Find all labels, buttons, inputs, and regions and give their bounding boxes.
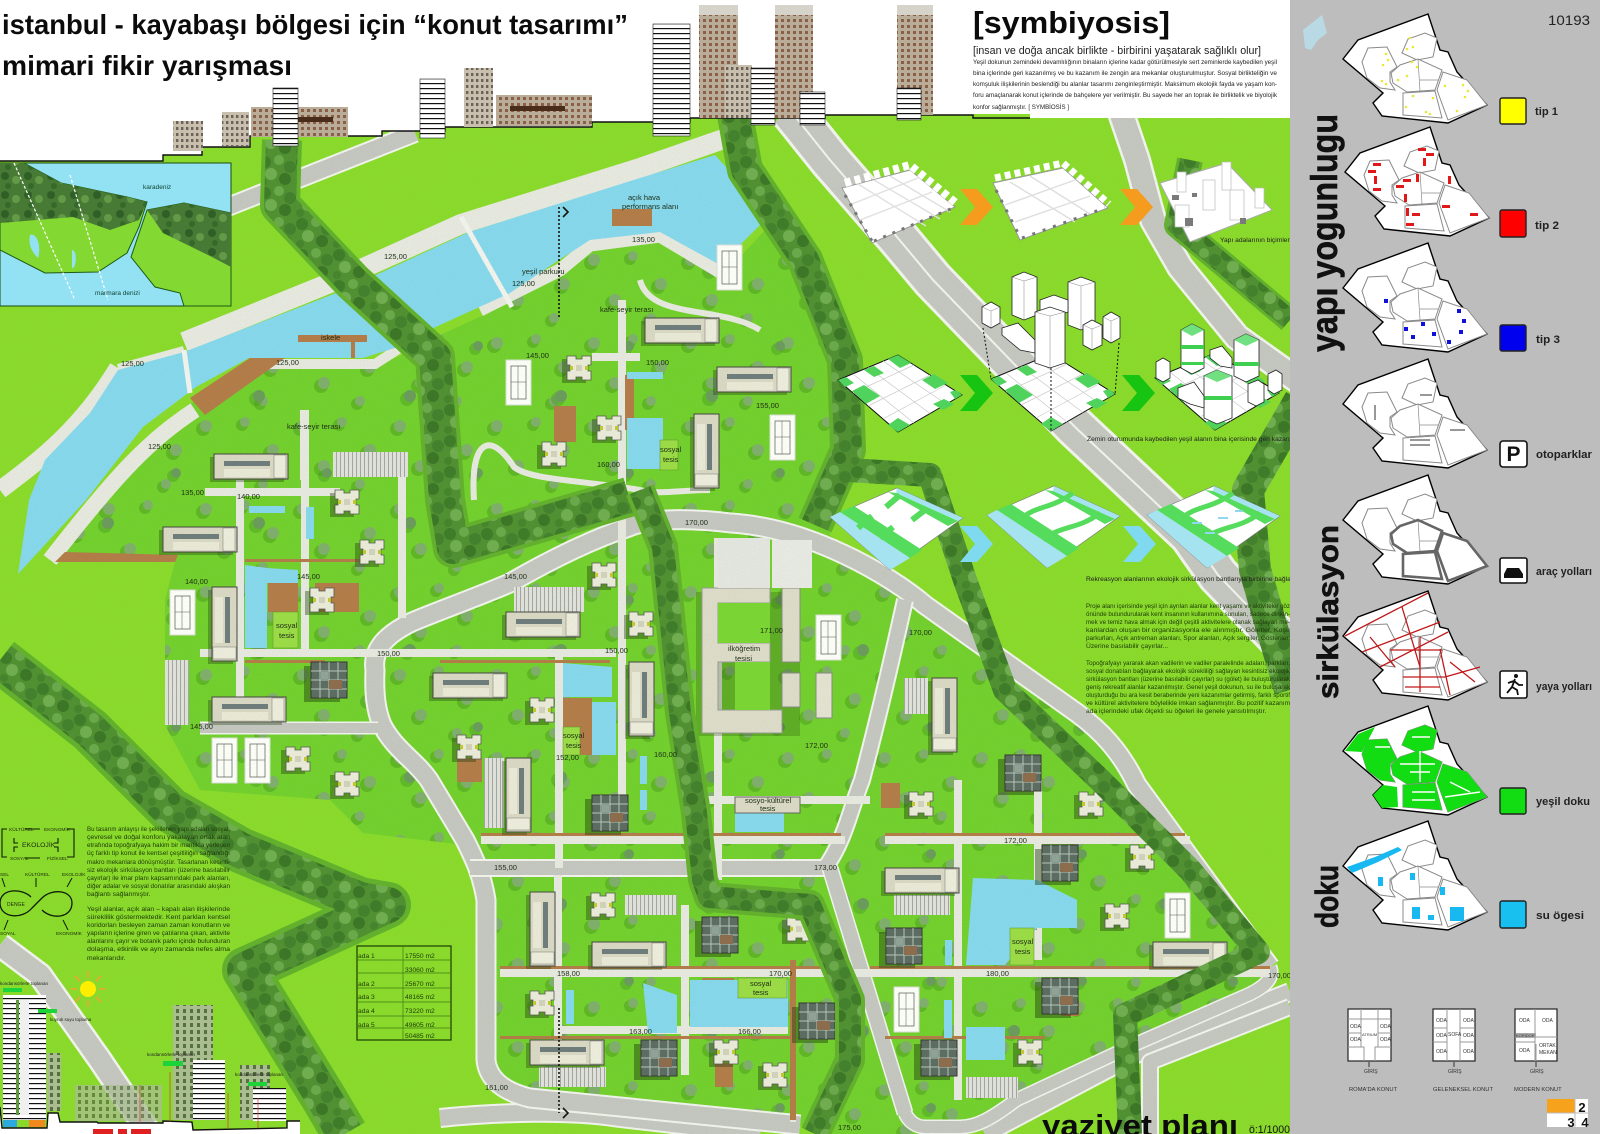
paragraph: green areas: kanlardan oluşan bir organizasyonla ele alınmıştır. Göletler, Koşu — [1086, 627, 1290, 634]
area table: ada 3 — [358, 994, 375, 1001]
right text block — [1086, 576, 1311, 715]
plan annotations: elevations and names: 158,00 — [557, 969, 580, 978]
diagram: ecological square — [2, 826, 74, 862]
plan annotations: elevations and names: 160,00 — [597, 460, 620, 469]
paragraph: topography: oluşturduğu bu ara kesit beraberinde yeni kazanımlar getirmiş, farklı sportif — [1086, 692, 1290, 699]
arrows: cyan chevrons — [960, 526, 1156, 562]
plan annotations: elevations and names: 160,00 — [654, 750, 677, 759]
key plan: otoparklar — [1343, 359, 1487, 468]
house plan: modern konut: ODA — [1542, 1018, 1554, 1024]
plan annotations: elevations and names: kafe-seyir terası — [287, 422, 340, 431]
road: curved top-right road — [1120, 110, 1300, 382]
concept text block: bina içlerinde geri kazanılmış ve bu kazanım ile zengin ara mekanlar oluşturulmuştur. Sosyal birlikteliğin ve — [973, 70, 1277, 77]
plan annotations: elevations and names: kafe-seyir terası — [600, 305, 653, 314]
wood decks along the river — [55, 209, 652, 562]
house plan: geleneksel konut: ODA — [1463, 1049, 1474, 1055]
house plan: geleneksel konut: GİRİŞ — [1448, 1068, 1462, 1075]
area table: 33060 m2 — [405, 967, 435, 974]
paragraph: topography: geniş rekreatif alanlar kazanılmıştır. Genel yeşil dokunun, su ile buluşarak — [1086, 684, 1291, 691]
concept text block: Yeşil dokunun zemindeki devamlılığının binaların içlerine kadar götürülmesiyle sert zeminlerde kaybedilen yeşil — [973, 59, 1277, 66]
diagram: balance infinity: SEL — [0, 872, 9, 878]
icon: sun — [70, 971, 106, 1007]
left text block: üç farklı tip konut ile kentsel çeşitliliğin sağlandığı — [87, 850, 230, 857]
area table: 73220 m2 — [405, 1008, 435, 1015]
left text block: diğer adalar ve sosyal donatılar arasındaki akışkan — [87, 883, 230, 890]
plan annotations: elevations and names: sosyal — [750, 979, 772, 988]
title: istanbul - kayabaşı bölgesi için “konut tasarımı” — [2, 9, 628, 40]
plan annotations: elevations and names: 155,00 — [494, 863, 517, 872]
house plan: roma'da konut: ATRIUM — [1362, 1032, 1377, 1037]
key plan: su ögesi — [1343, 821, 1487, 930]
road: lower-left diagonal road — [0, 945, 150, 1134]
arrows: green chevrons — [960, 375, 1155, 411]
plan annotations: elevations and names: 170,00 — [1268, 971, 1291, 980]
section cut markers — [559, 207, 568, 1118]
vertical heading: sirkülasyon: sirkülasyon — [1312, 525, 1345, 699]
wood strips beside walkways — [245, 375, 1270, 1120]
plan annotations: elevations and names: iskele — [321, 333, 340, 342]
plan annotations: elevations and names: 166,00 — [738, 1027, 761, 1036]
plan annotations: elevations and names: 150,00 — [605, 646, 628, 655]
plan annotations: elevations and names: 175,00 — [838, 1123, 861, 1132]
grain overlay — [0, 118, 1290, 1134]
house plan: modern konut: ORTAK — [1539, 1043, 1556, 1049]
area table: 25670 m2 — [405, 981, 435, 988]
caption: building islands: Yapı adalarının biçimlenişi — [1220, 237, 1298, 244]
house plan: modern konut — [1514, 1009, 1562, 1093]
left text block: çayırlar) ile imar planı kapsamındaki park alanları, — [87, 875, 230, 882]
paragraph: topography: Topoğrafyayı yararak akan vadilerin ve vadiler paralelinde adaları, parkları, — [1086, 660, 1290, 667]
house plan: roma'da konut: ODA — [1380, 1024, 1392, 1030]
buildings: cross plan houses — [281, 356, 1154, 1090]
building section drawing: kondansörlerle toplanan — [0, 981, 49, 986]
plan annotations: elevations and names: 145,00 — [297, 572, 320, 581]
plan annotations: elevations and names: sosyal — [563, 731, 585, 740]
plan annotations: elevations and names: 152,00 — [556, 753, 579, 762]
plan annotations: elevations and names: tesis — [663, 455, 679, 464]
sheet index 1-2-3-4 — [1547, 1099, 1589, 1130]
plan annotations: elevations and names: 150,00 — [377, 649, 400, 658]
house plan: roma'da konut: ODA — [1350, 1037, 1362, 1043]
bridges over the lake — [184, 217, 512, 393]
plan annotations: elevations and names: 172,00 — [805, 741, 828, 750]
main roads of the site — [200, 520, 1271, 1127]
icon: pedestrian — [1500, 671, 1527, 698]
house plan: roma'da konut: GİRİŞ — [1364, 1068, 1378, 1075]
left text block: Yeşil alanlar, açık alan – kapalı alan ilişkilerinde — [87, 906, 230, 913]
plan annotations: elevations and names: 170,00 — [769, 969, 792, 978]
building section drawing: kuyruk suyu toplama — [50, 1017, 92, 1022]
area table — [357, 946, 451, 1040]
plan annotations: elevations and names: 163,00 — [629, 1027, 652, 1036]
house plan: modern konut: MODERN KONUT — [1514, 1087, 1562, 1093]
diagram: ecological square: SOSYAL — [10, 856, 29, 862]
plan annotations: elevations and names: 161,00 — [485, 1083, 508, 1092]
left text block — [87, 826, 231, 962]
caption: ground recovery: Zemin oturumunda kaybedilen yeşil alanın bina içerisinde geri kazanılması — [1087, 436, 1308, 443]
primary school building — [696, 538, 832, 736]
promenade: river walkways — [0, 135, 735, 560]
plan annotations: elevations and names: sosyal — [276, 621, 298, 630]
plan annotations: elevations and names: 171,00 — [760, 626, 783, 635]
plan annotations: elevations and names: açık hava — [628, 193, 661, 202]
house plan: geleneksel konut: ODA — [1463, 1033, 1474, 1039]
paragraph: topography: sirkülasyon bantları (üzerine basılabilir çayırlar) su (gölet) ile buluşturularak — [1086, 676, 1291, 683]
plan annotations: elevations and names: 145,00 — [504, 572, 527, 581]
plan annotations: elevations and names: tesis — [1015, 947, 1031, 956]
left text block: süreklilik göstermektedir. Kent parkları kentsel — [87, 914, 231, 921]
plan annotations: elevations and names: 125,00 — [384, 252, 407, 261]
house plan: roma'da konut — [1348, 1009, 1398, 1093]
title: mimari fikir yarışması — [2, 50, 292, 81]
isometric step row 3: recreation sheets — [830, 486, 1280, 570]
house plan: geleneksel konut — [1433, 1009, 1493, 1093]
label: yeşil doku: yeşil doku — [1536, 796, 1590, 808]
house plan: geleneksel konut: ODA — [1436, 1049, 1448, 1055]
left text block: Bu tasarım anlayışı ile şekillenen yapı adaları sosyal, — [87, 826, 230, 833]
arrows: orange chevrons — [960, 189, 1153, 225]
plan annotations: elevations and names: tesis — [753, 988, 769, 997]
label: araç yolları: araç yolları — [1536, 566, 1592, 578]
area table: 50485 m2 — [405, 1033, 435, 1040]
plan annotations: elevations and names: tesisi — [735, 654, 752, 663]
house plan: roma'da konut: ODA — [1380, 1037, 1392, 1043]
plan annotations: elevations and names: 135,00 — [181, 488, 204, 497]
house plan: geleneksel konut: GELENEKSEL KONUT — [1433, 1087, 1493, 1093]
plan annotations: elevations and names: tesis — [760, 804, 776, 813]
left text block: çevresel ve doğal konforu yakalayan ortak alan — [87, 834, 230, 841]
key plan: tip 3 — [1343, 243, 1487, 352]
diagram: balance infinity: EKONOMİK — [56, 930, 83, 937]
plan annotations: elevations and names: sosyo-kültürel — [745, 796, 792, 805]
paragraph: topography: ada içlerindeki ufak ölçekli su öğeleri ile genele yansıtılmıştır. — [1086, 708, 1266, 715]
area table: 48165 m2 — [405, 994, 435, 1001]
left text block: alanlarını çayır ve botanik parkı içinde bulunduran — [87, 938, 230, 945]
skyline elevation — [173, 5, 933, 151]
left text block: yapıların içlerine giren ve çatılarına çıkan, aktivite — [87, 930, 230, 937]
diagram: balance infinity: SOYAL — [0, 931, 16, 937]
icon: parking: P — [1506, 443, 1521, 466]
icon: water logo — [1303, 15, 1327, 50]
plan annotations: elevations and names: 135,00 — [632, 235, 655, 244]
label: su ögesi: su ögesi — [1536, 910, 1584, 922]
house plan: modern konut: KORİDOR — [1516, 1033, 1535, 1038]
swatch: yeşil doku — [1500, 788, 1526, 814]
paragraph: topography: sosyal donatıları bağlayarak ekolojik sürekliliği sağlayan kesintisiz ekolojik — [1086, 668, 1291, 675]
plan annotations: elevations and names: sosyal — [660, 445, 682, 454]
road: lower highways — [440, 992, 1290, 1134]
plan annotations: elevations and names: 170,00 — [909, 628, 932, 637]
area table: ada 1 — [358, 953, 375, 960]
key plan: tip 2 — [1345, 127, 1489, 236]
sidebar panel — [1290, 0, 1600, 1134]
label: otoparklar: otoparklar — [1536, 449, 1593, 461]
house plan: geleneksel konut: SOFA — [1448, 1032, 1462, 1038]
diagram: balance infinity: DENGE — [7, 902, 25, 908]
vertical heading: yapı yogunlugu: yapı yogunlugu — [1304, 114, 1345, 352]
swatch: tip 2 — [1500, 210, 1526, 237]
diagram: ecological square: EKONOMİK — [44, 826, 71, 833]
plan annotations: elevations and names: yeşil parkuru — [522, 267, 565, 276]
key plan: tip 1 — [1343, 14, 1487, 123]
paragraph: green areas: önünde bulundurularak kent insanının kullanımına sunulan, sadece dinlen- — [1086, 611, 1290, 618]
diagram: balance infinity: KÜLTÜREL — [25, 871, 50, 878]
swatch: tip 1 — [1500, 98, 1526, 124]
label: tip 3: tip 3 — [1536, 334, 1560, 346]
building section drawing: kondansörlerle toplanan — [147, 1052, 196, 1057]
location map inset: marmara denizi — [95, 290, 140, 297]
left text block: etrafında topoğrafyaya hakim bir mantıkla yerleşen — [87, 842, 230, 849]
key plan: yaya yolları — [1343, 591, 1487, 700]
parking lots — [165, 452, 1018, 1098]
plan annotations: elevations and names: 150,00 — [646, 358, 669, 367]
sky: white upper band — [0, 0, 1290, 161]
paragraph: topography: ve kültürel aktivitelere böylelikle imkan sağlanmıştır. Bu pozitif kazanım — [1086, 700, 1290, 707]
project number: 10193 — [1548, 12, 1590, 28]
left text block: mekanlarıdır. — [87, 955, 126, 962]
plan annotations: elevations and names: 170,00 — [685, 518, 708, 527]
diagram: ecological square: KÜLTÜREL — [9, 826, 34, 833]
area table: ada 2 — [358, 981, 375, 988]
paragraph: green areas: Proje alanı içerisinde yeşil için ayrılan alanlar kent yaşamı ve aktiviteler göz — [1086, 603, 1291, 610]
left text block: siz ekolojik sirkülasyon bantları (üzerine basılabilir — [87, 867, 231, 874]
plan annotations: elevations and names: 125,00 — [148, 442, 171, 451]
corridor: lower-left band D — [0, 660, 388, 1134]
left text block: dolaşma, etkinlik ve aynı zamanda nefes alma — [87, 946, 230, 953]
diagram: ecological square: FİZİKSEL — [47, 855, 68, 862]
corridor: upper diagonal band C — [735, 115, 1258, 1134]
icon: parking — [1500, 441, 1527, 467]
house plan: modern konut: ODA — [1519, 1048, 1530, 1054]
plan annotations: elevations and names: tesis — [279, 631, 295, 640]
area table: ada 4 — [358, 1008, 375, 1015]
paragraph: green areas: mek ve temiz hava almak için değil çeşitli aktivitelere olanak sağlayan me- — [1086, 619, 1290, 626]
left text block: makro mekanlara dönüşmüştür. Tasarlanan kesinti- — [87, 859, 230, 866]
swatch: su ögesi — [1500, 901, 1526, 928]
plan annotations: elevations and names: 125,00 — [512, 279, 535, 288]
plan annotations: elevations and names: 140,00 — [237, 492, 260, 501]
pedestrian walkways — [200, 280, 1270, 1122]
plan annotations: elevations and names: ilköğretim — [728, 644, 760, 653]
road: upper-left diagonal road — [225, 133, 415, 208]
left text block: koridorları besleyen zaman zaman konutların ve — [87, 922, 230, 929]
plan annotations: elevations and names: 145,00 — [190, 722, 213, 731]
left text block: bağlantı sağlanmıştır. — [87, 891, 151, 898]
isometric step row 1: building blocks — [842, 162, 1272, 243]
paragraph: topography — [1086, 660, 1291, 715]
label: tip 1: tip 1 — [1535, 106, 1558, 118]
house plan: modern konut: ODA — [1519, 1018, 1530, 1024]
key plan: yeşil doku — [1343, 706, 1487, 815]
buildings: slab blocks — [159, 318, 1227, 1068]
area table: 17550 m2 — [405, 953, 435, 960]
concept text block — [973, 59, 1278, 111]
heading: symbiyosis: [symbiyosis] — [973, 5, 1170, 40]
caption: recreation circulation: Rekreasyon alanlarının ekolojik sirkülasyon bantlarıyla birbirine bağlanması. — [1086, 576, 1311, 583]
area table: ada 5 — [358, 1022, 375, 1029]
plan base: site plot — [50, 225, 1270, 1134]
icon: car — [1500, 558, 1527, 583]
location map inset — [0, 163, 231, 306]
building section drawing — [0, 981, 300, 1134]
plan annotations: elevations and names: 125,00 — [276, 358, 299, 367]
diagram: balance infinity: EKOLOJİK — [62, 871, 86, 878]
diagram: balance infinity — [0, 871, 86, 937]
social building: sosyo-kultürel tesis — [735, 797, 800, 813]
social facility pads — [273, 440, 1034, 998]
courts: basketball and tennis — [170, 245, 1190, 1032]
plan annotations: elevations and names: 155,00 — [756, 401, 779, 410]
corridor: central band B — [640, 490, 850, 1134]
area table: 49605 m2 — [405, 1022, 435, 1029]
water: river and lake — [18, 155, 770, 574]
plan annotations: elevations and names: performans alanı — [622, 202, 678, 211]
plan annotations: elevations and names: 180,00 — [986, 969, 1009, 978]
house plan: roma'da konut: ODA — [1350, 1024, 1362, 1030]
isometric step row 2: ground plates and towers — [838, 272, 1282, 432]
concept text block: komşuluk ilişkilerinin beslendiği bu alanlar tasarımı zenginleştirmiştir. Maksimum ekolojik fayda ve yaşam kon- — [973, 81, 1277, 88]
concept text block: foru amaçlanarak konut içlerinde de bahçelere yer verilmiştir. Bu sayede her an toprak ile birliktelik ve biyolojik — [973, 92, 1278, 99]
plan annotations: elevations and names: 145,00 — [526, 351, 549, 360]
subheading: [insan ve doğa ancak birlikte - birbirini yaşatarak sağlıklı olur] — [973, 45, 1261, 57]
diagram: ecological square: EKOLOJİK — [22, 840, 56, 849]
plan annotations: elevations and names: 140,00 — [185, 577, 208, 586]
ponds inside the islands — [245, 372, 1077, 1060]
swatch: tip 3 — [1500, 325, 1526, 351]
paragraph: green areas: parkurları, Açık antreman alanları, Spor alanları, Açık sergiler, Gösteriler, — [1086, 635, 1290, 642]
sheet index 1-2-3-4: 2 — [1578, 1100, 1586, 1115]
house plan: roma'da konut: ROMA'DA KONUT — [1349, 1087, 1398, 1093]
vertical heading: doku: doku — [1309, 865, 1345, 928]
plan annotations: elevations and names — [121, 193, 1291, 1132]
buildings: glass tower blocks — [304, 662, 1078, 1080]
corridor: main ecological band A — [280, 140, 629, 548]
house plan: modern konut: GİRİŞ — [1530, 1068, 1544, 1075]
concept text block: konfor sağlanmıştır. [ SYMBİOSİS ] — [973, 102, 1069, 111]
label: yaya yolları: yaya yolları — [1536, 681, 1592, 693]
house plan: geleneksel konut: ODA — [1436, 1033, 1448, 1039]
sheet index 1-2-3-4: 4 — [1581, 1115, 1589, 1130]
plan annotations: elevations and names: 173,00 — [814, 863, 837, 872]
key plan: araç yolları — [1343, 475, 1487, 584]
plan annotations: elevations and names: tesis — [566, 741, 582, 750]
paragraph: green areas — [1086, 603, 1291, 650]
terrain ground line — [0, 115, 1030, 161]
plan annotations: elevations and names: 172,00 — [1004, 836, 1027, 845]
building section drawing: kondansörlerle toplanan — [235, 1072, 284, 1077]
house plan: geleneksel konut: ODA — [1436, 1018, 1448, 1024]
sheet index 1-2-3-4: 3 — [1567, 1115, 1575, 1130]
plan annotations: elevations and names: sosyal — [1012, 937, 1034, 946]
house plan: modern konut: MEKAN — [1539, 1050, 1557, 1056]
title — [2, 9, 628, 81]
location map inset: karadeniz — [143, 184, 171, 191]
paragraph: green areas: Üzerine basılabilir çayırlar... — [1086, 642, 1168, 650]
house plan: geleneksel konut: ODA — [1463, 1018, 1474, 1024]
label: tip 2: tip 2 — [1535, 220, 1559, 232]
corridor: right ecological band upper — [1177, 160, 1300, 690]
road: top-right highway — [790, 110, 1300, 660]
plan annotations: elevations and names: 125,00 — [121, 359, 144, 368]
